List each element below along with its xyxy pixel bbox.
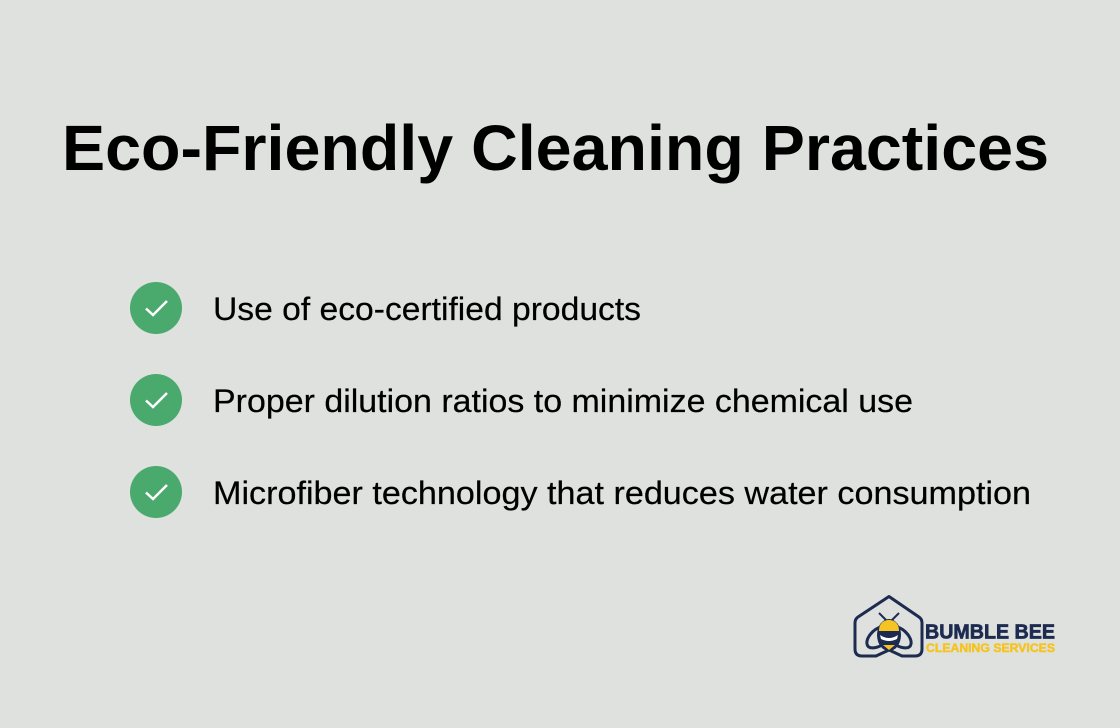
icon: check badge 3 xyxy=(130,466,182,518)
list item: proper dilution ratios xyxy=(130,374,913,426)
item text 3: Microfiber technology that reduces water consumption xyxy=(213,475,1031,511)
icon: check badge 2 xyxy=(130,374,182,426)
icon: bee in house xyxy=(855,596,922,656)
title: Eco-Friendly Cleaning Practices xyxy=(62,112,1049,184)
item text 2: Proper dilution ratios to minimize chemical use xyxy=(213,383,913,419)
icon: check badge 1 xyxy=(130,282,182,334)
logo tagline: CLEANING SERVICES xyxy=(926,641,1055,655)
list item: microfiber technology xyxy=(130,466,1031,518)
item text 1: Use of eco-certified products xyxy=(213,291,641,327)
logo wordmark: BUMBLE BEE xyxy=(925,620,1055,644)
list item: eco-certified products xyxy=(130,282,641,334)
logo: Bumble Bee Cleaning Services xyxy=(855,596,1055,656)
